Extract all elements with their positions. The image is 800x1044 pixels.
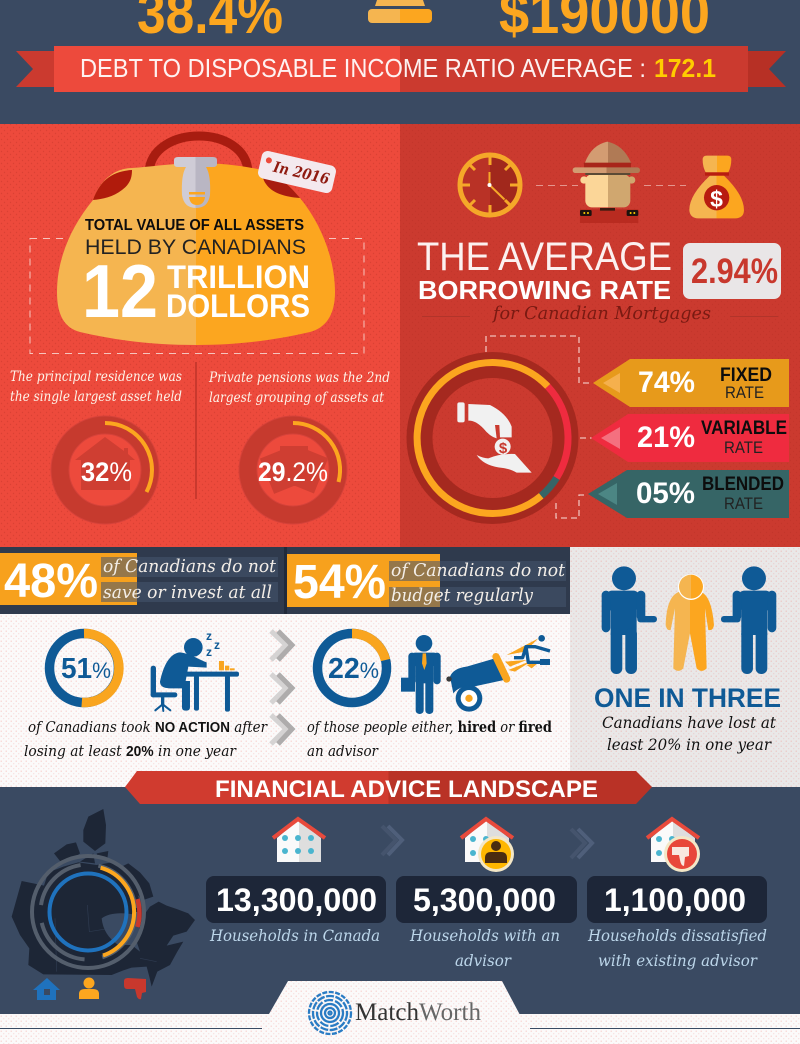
chart: 51 percent donut: 51% bbox=[61, 653, 111, 685]
caption: hired or fired: of those people either, hired or fired bbox=[307, 719, 552, 736]
stat: 54 percent do not budget: 54% bbox=[293, 556, 386, 609]
caption: hired or fired: an advisor bbox=[307, 744, 379, 760]
caption: took no action: of Canadians took NO ACTION after bbox=[28, 720, 268, 736]
text: private pensions bbox=[208, 370, 390, 406]
icon: bag with title bbox=[57, 136, 335, 345]
icon: house with thumbs down badge bbox=[647, 819, 700, 872]
footer: MatchWorth logo bbox=[0, 981, 800, 1044]
caption: hired or fired bbox=[307, 719, 552, 760]
panel: total assets bbox=[0, 124, 400, 547]
text: lost at least 20 percent: least 20% in one year bbox=[607, 735, 772, 754]
tag: fixed rate: RATE bbox=[725, 384, 764, 402]
tag: blended rate: RATE bbox=[724, 495, 763, 513]
icon: legend person bbox=[79, 978, 99, 999]
icon: bag with title: TOTAL VALUE OF ALL ASSETS bbox=[85, 217, 304, 234]
arrow: chevron one bbox=[382, 826, 402, 855]
badge: 2.94 percent bbox=[683, 243, 781, 299]
icon: house with advisor badge bbox=[461, 819, 514, 872]
ribbon: debt to income ratio bbox=[16, 46, 786, 92]
wordmark: MatchWorth bbox=[355, 999, 481, 1026]
tag: variable rate: 21% bbox=[637, 421, 695, 454]
icon: advisor with briefcase bbox=[401, 635, 441, 714]
tag: in 2016: In 2016 bbox=[271, 158, 332, 188]
tag: variable rate: RATE bbox=[724, 439, 763, 457]
stat: 54 percent do not budget: budget regularly bbox=[391, 585, 534, 606]
stat box: households dissatisfied: Households dissatisfied bbox=[587, 926, 767, 945]
icon: hand dropping coin bbox=[457, 402, 532, 473]
icon: fingerprint bbox=[309, 992, 351, 1034]
badge: 2.94 percent: 2.94% bbox=[691, 252, 778, 291]
chart: 32 percent ring: 32% bbox=[81, 457, 132, 487]
chart: borrowing rate donut bbox=[417, 363, 568, 514]
chart: 22 percent donut: 22% bbox=[328, 653, 379, 685]
stat: 48 percent do not save bbox=[0, 553, 278, 608]
chart: 32 percent ring bbox=[51, 416, 159, 524]
stat box: households with an advisor: advisor bbox=[455, 951, 512, 970]
icon: bag with title: TRILLION bbox=[167, 259, 310, 295]
panel: average borrowing rate: $ bbox=[499, 440, 508, 457]
panel: savings and budget strip bbox=[0, 547, 570, 614]
text: private pensions: largest grouping of assets at bbox=[209, 390, 384, 406]
stat box: households dissatisfied: 1,100,000 bbox=[604, 882, 746, 918]
icon: person asleep at desk: z bbox=[206, 629, 212, 643]
panel: no action and advisor changes bbox=[0, 614, 570, 787]
heading: the average borrowing rate bbox=[417, 235, 672, 305]
chart: 29.2 percent ring: 29.2% bbox=[258, 457, 328, 487]
stat: 54 percent do not budget bbox=[287, 554, 566, 609]
heading: the average borrowing rate: BORROWING RATE bbox=[418, 275, 671, 305]
stat box: households dissatisfied bbox=[587, 876, 767, 970]
icon: orange pedestal bbox=[368, 0, 432, 23]
arrows: grey chevrons bbox=[271, 631, 292, 744]
stat box: households with an advisor: 5,300,000 bbox=[413, 882, 556, 918]
panel: financial advice landscape bbox=[0, 787, 800, 1014]
text: private pensions: Private pensions was the 2nd bbox=[208, 370, 390, 386]
text: principal residence: the single largest asset held bbox=[10, 389, 182, 405]
heading: one in three: ONE IN THREE bbox=[594, 683, 781, 713]
icon: person asleep at desk bbox=[151, 629, 239, 712]
stat: 48 percent do not save: save or invest at all bbox=[103, 582, 272, 603]
arrow: chevron two bbox=[571, 829, 592, 858]
subheading: for Canadian mortgages: for Canadian Mortgages bbox=[491, 303, 711, 324]
caption: took no action bbox=[24, 720, 268, 760]
banner: financial advice landscape: FINANCIAL ADVICE LANDSCAPE bbox=[215, 776, 598, 803]
icon: money bag bbox=[689, 156, 744, 218]
stat: 48 percent do not save: of Canadians do not bbox=[103, 556, 277, 577]
icon: person asleep at desk: z bbox=[214, 638, 220, 652]
icon: bag with title: HELD BY CANADIANS bbox=[85, 236, 306, 259]
tag: fixed rate bbox=[593, 359, 789, 407]
map: Canada with rings bbox=[12, 809, 195, 987]
tag: variable rate: VARIABLE bbox=[701, 418, 787, 439]
text: principal residence: The principal residence was bbox=[10, 369, 182, 385]
icon: legend house bbox=[33, 978, 60, 1000]
stat box: households dissatisfied: with existing advisor bbox=[598, 951, 758, 970]
icon: money bag: $ bbox=[710, 186, 723, 212]
icon: house bbox=[273, 819, 325, 862]
caption: took no action: losing at least 20% in one year bbox=[24, 744, 237, 760]
chart: 22 percent donut bbox=[318, 634, 386, 702]
stat box: households in Canada: Households in Canada bbox=[209, 926, 380, 945]
icon: person asleep at desk: z bbox=[206, 645, 212, 659]
icon: bag with title: 12 bbox=[82, 249, 158, 333]
panel: average borrowing rate bbox=[400, 124, 800, 547]
stat box: households with an advisor: Households with an bbox=[409, 926, 560, 945]
stat box: households with an advisor bbox=[396, 876, 577, 970]
tag: fixed rate: 74% bbox=[638, 366, 695, 399]
stat box: households in Canada: 13,300,000 bbox=[216, 882, 377, 918]
tag: blended rate: BLENDED bbox=[702, 474, 784, 495]
text: principal residence bbox=[10, 369, 182, 405]
tag: variable rate bbox=[591, 414, 789, 462]
icon: bag with title: DOLLORS bbox=[166, 288, 310, 324]
tag: fixed rate: FIXED bbox=[720, 365, 772, 386]
icon: three people bbox=[602, 566, 776, 674]
banner: financial advice landscape bbox=[125, 771, 652, 804]
icon: mountie bbox=[573, 142, 640, 223]
text: lost at least 20 percent bbox=[602, 713, 777, 754]
icon: legend thumbs down bbox=[124, 978, 146, 999]
ribbon: debt to income ratio: 172.1 bbox=[654, 53, 716, 83]
panel: one in three bbox=[570, 547, 800, 787]
heading: the average borrowing rate: THE AVERAGE bbox=[417, 235, 672, 279]
panel: top debt summary bbox=[0, 0, 800, 124]
tag: blended rate bbox=[588, 470, 789, 518]
icon: clock bbox=[460, 155, 520, 215]
stat: 48 percent do not save: 48% bbox=[4, 555, 98, 608]
text: lost at least 20 percent: Canadians have lost at bbox=[602, 713, 777, 732]
chart: 51 percent donut bbox=[50, 633, 119, 702]
icon: cannon firing a person bbox=[446, 635, 550, 712]
stat: 54 percent do not budget: of Canadians do not bbox=[391, 560, 566, 581]
tag: blended rate: 05% bbox=[636, 477, 695, 510]
stat box: households in Canada bbox=[206, 876, 386, 945]
chart: 29.2 percent ring bbox=[239, 416, 347, 524]
tag: in 2016 bbox=[257, 150, 337, 194]
ribbon: debt to income ratio: DEBT TO DISPOSABLE INCOME RATIO AVERAGE : bbox=[80, 53, 646, 83]
